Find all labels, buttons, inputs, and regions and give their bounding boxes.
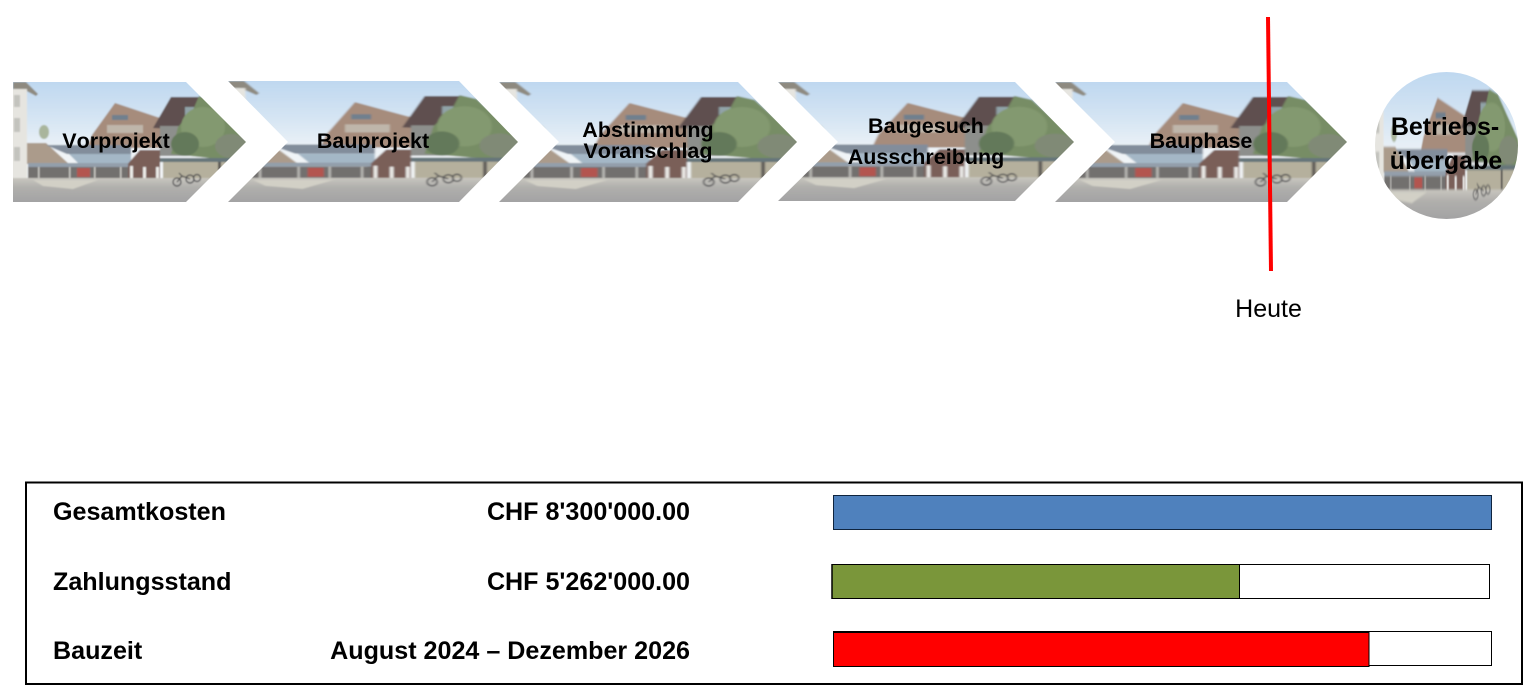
step: Betriebsübergabe circle: Betriebs-	[1391, 113, 1499, 141]
row: Gesamtkosten value: CHF 8'300'000.00	[487, 498, 690, 526]
bar: Zahlungsstand	[832, 564, 1490, 599]
row: Zahlungsstand label: Zahlungsstand	[53, 568, 231, 596]
step: Baugesuch Ausschreibung: Ausschreibung	[848, 145, 1004, 169]
row: Gesamtkosten label: Gesamtkosten	[53, 498, 226, 526]
step: Vorprojekt: Vorprojekt	[62, 129, 170, 153]
step: Bauphase: Bauphase	[1150, 129, 1252, 153]
step: Bauphase	[1051, 79, 1351, 205]
process chevrons	[10, 78, 1351, 205]
step: Abstimmung Voranschlag: Voranschlag	[583, 139, 713, 163]
step: Vorprojekt	[10, 79, 249, 205]
step: Betriebsübergabe circle	[1373, 68, 1520, 223]
row: Zahlungsstand value: CHF 5'262'000.00	[487, 568, 690, 596]
step: Betriebsübergabe circle: übergabe	[1390, 147, 1502, 175]
row: Bauzeit value: August 2024 – Dezember 2026	[330, 637, 690, 665]
step: Baugesuch Ausschreibung	[774, 79, 1078, 204]
step: Bauprojekt	[224, 78, 522, 205]
step: Bauprojekt: Bauprojekt	[317, 129, 429, 153]
step: Abstimmung Voranschlag	[495, 79, 801, 205]
step: Baugesuch Ausschreibung: Baugesuch	[868, 114, 984, 138]
today label: Heute	[1235, 295, 1302, 323]
step: Abstimmung Voranschlag: Abstimmung	[582, 118, 714, 142]
panel: project status	[26, 482, 1522, 684]
row: Bauzeit label: Bauzeit	[53, 637, 143, 665]
bar: Gesamtkosten	[834, 496, 1492, 530]
today marker line	[1268, 17, 1271, 271]
bar: Bauzeit	[833, 632, 1492, 666]
